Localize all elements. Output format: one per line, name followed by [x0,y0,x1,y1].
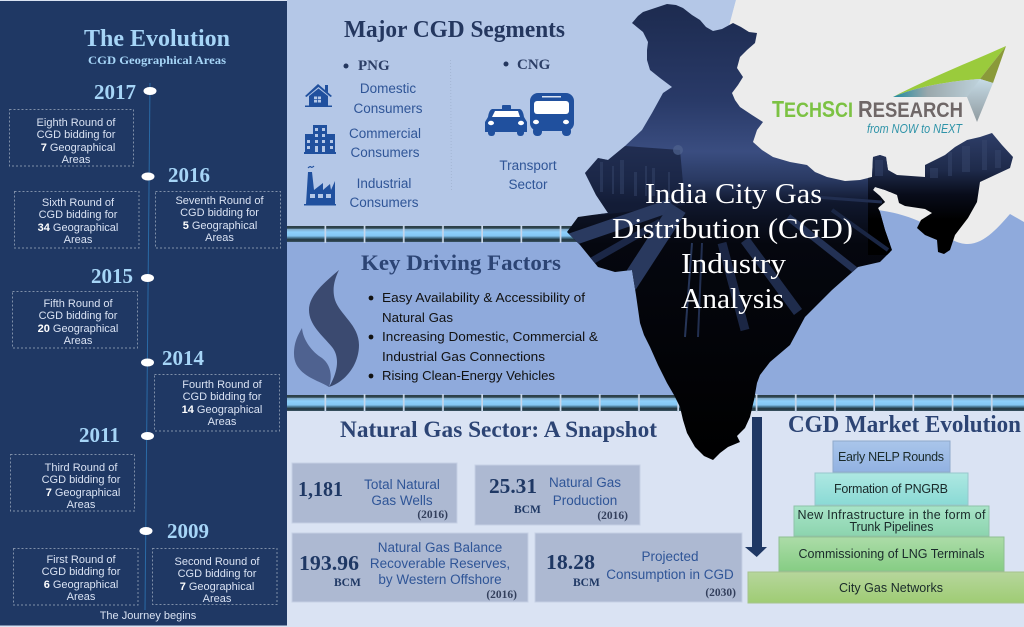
icon: bus [530,93,574,136]
photo texture: dark refinery on the west [580,146,685,215]
logo tagline: from NOW to NEXT [867,121,963,136]
box: fourth round: Fourth Round of [182,379,263,391]
box: fifth round: 20 Geographical [38,323,118,335]
arrow: market evolution direction [745,417,767,557]
stat: natural gas production: Natural Gas [549,475,621,490]
stat: balance recoverable reserves: Recoverable Reserves, [370,556,510,571]
box: first round: CGD bidding for [42,566,121,578]
box: third round: Third Round of [45,462,118,474]
map: India silhouette with pipeline photo [560,0,1018,470]
box: eighth round: 7 Geographical [41,142,115,154]
heading: Key Driving Factors: Key Driving Factors [361,250,561,275]
box: seventh round: Areas [205,232,234,244]
title: India City Gas Distribution (CGD) Industry Analysis: India City Gas [645,179,822,210]
stat: balance recoverable reserves: 193.96 [299,551,359,575]
stat: natural gas production [475,465,640,525]
label: PNG [344,58,390,74]
pyramid level: early NELP rounds: Early NELP Rounds [838,450,944,464]
box: fourth round [154,374,280,431]
timeline node: 2009 [140,519,209,543]
box: third round [10,454,134,511]
stat: natural gas production: 25.31 [489,474,537,498]
stat: total natural gas wells: 1,181 [298,477,343,501]
box: second round: 7 Geographical [180,581,254,593]
timeline node: 2014: 2014 [162,346,204,370]
stat: projected consumption: 18.28 [546,550,595,574]
panel: key driving factors [294,250,598,387]
timeline node: 2017 [94,80,156,104]
pyramid level: early NELP rounds [833,441,950,472]
text: domestic consumers [353,81,423,116]
pyramid level: LNG terminals [779,537,1004,571]
box: fourth round: 14 Geographical [182,404,262,416]
timeline node: 2011 [79,423,154,447]
box: fifth round: Areas [64,335,93,347]
heading: CGD Market Evolution: CGD Market Evolution [788,412,1021,438]
box: seventh round [156,192,280,248]
stat: projected consumption: Projected [641,549,699,564]
box: sixth round [14,192,139,248]
icon: taxi [485,105,527,136]
box: eighth round: CGD bidding for [37,129,116,141]
stat: balance recoverable reserves: by Western Offshore [378,572,502,587]
stat: total natural gas wells: (2016) [417,509,448,521]
list: driving factors: Industrial Gas Connections [382,349,546,364]
pipeline: lower [287,394,1024,412]
stat: projected consumption [535,533,742,602]
heading: Natural Gas Sector: A Snapshot: Natural Gas Sector: A Snapshot [340,417,657,442]
list: driving factors: Increasing Domestic, Commercial & [382,329,598,344]
text: industrial consumers [349,176,419,210]
box: fourth round: Areas [208,416,237,428]
icon: factory [304,166,336,206]
stat: balance recoverable reserves: (2016) [486,589,517,601]
box: seventh round: 5 Geographical [183,220,257,232]
pyramid level: LNG terminals: Commissioning of LNG Terminals [798,547,984,561]
timeline node: 2016 [142,163,210,187]
box: third round: Areas [67,499,96,511]
timeline node: 2015 [91,264,154,288]
caption: the journey begins: The Journey begins [100,610,197,622]
box: fifth round [12,292,138,348]
box: third round: CGD bidding for [42,474,121,486]
logo wordmark: TECHSCI [772,96,853,122]
photo texture: skyline [600,148,1001,198]
panel: natural gas snapshot [292,417,742,602]
text: commercial consumers: Consumers [350,145,420,160]
text: transport sector [499,158,557,192]
box: first round [14,548,138,605]
icon: commercial building [304,125,336,154]
text: industrial consumers: Industrial [357,176,411,191]
box: third round: 7 Geographical [46,487,120,499]
text: industrial consumers: Consumers [349,195,419,210]
icon: house [305,84,332,107]
stat: balance recoverable reserves: BCM [334,577,361,589]
timeline node: 2014 [141,346,204,370]
text: transport sector: Sector [508,177,548,192]
stat: balance recoverable reserves: Natural Gas Balance [378,540,502,555]
box: fifth round: CGD bidding for [39,310,118,322]
box: first round: Areas [67,591,96,603]
logo: TechSci Research: RESEARCH [858,96,963,122]
timeline axis [145,83,150,610]
list: driving factors: Easy Availability & Accessibility of [382,290,585,305]
background: top right light grey area [700,0,1024,244]
box: first round: 6 Geographical [44,579,118,591]
box: second round [152,548,277,605]
pyramid level: city gas networks [748,572,1024,603]
text: transport sector: Transport [499,158,557,173]
timeline node: 2017: 2017 [94,80,136,104]
timeline node: 2009: 2009 [167,519,209,543]
list: driving factors: Rising Clean-Energy Vehicles [382,368,555,383]
box: first round: First Round of [46,554,116,566]
box: sixth round: 34 Geographical [38,222,118,234]
stat: natural gas production: BCM [514,504,541,516]
timeline node: 2015: 2015 [91,264,133,288]
title: India City Gas Distribution (CGD) Industry Analysis: Industry [681,249,786,280]
box: eighth round [10,110,134,166]
panel: the evolution timeline [0,1,287,626]
box: sixth round: Areas [64,234,93,246]
title: India City Gas Distribution (CGD) Industry Analysis [612,179,853,315]
stat: total natural gas wells [292,463,457,523]
logo mark [893,46,1006,122]
pipeline: upper [287,225,587,243]
stat: total natural gas wells: Total Natural [364,477,440,492]
text: domestic consumers: Domestic [360,81,416,96]
label: PNG: PNG [358,58,390,74]
label: CNG: CNG [517,57,551,73]
pyramid level: trunk pipelines: New Infrastructure in the form of [798,508,986,522]
text: commercial consumers: Commercial [349,126,421,141]
pyramid level: formation of PNGRB: Formation of PNGRB [834,482,948,496]
box: second round: Second Round of [174,556,260,568]
box: seventh round: Seventh Round of [175,195,264,207]
box: fifth round: Fifth Round of [43,298,113,310]
icon: gas flame [294,270,359,387]
stat: projected consumption: BCM [573,577,600,589]
text: domestic consumers: Consumers [353,101,423,116]
heading: The Evolution: The Evolution [84,26,230,52]
photo texture: converging pipes [570,197,888,337]
pyramid level: trunk pipelines: Trunk Pipelines [850,520,934,534]
logo: TechSci Research [772,46,1006,136]
text: commercial consumers [349,126,421,160]
title: India City Gas Distribution (CGD) Industry Analysis: Distribution (CGD) [612,214,853,245]
background: key driving factors band [287,210,1024,400]
box: eighth round: Eighth Round of [37,117,116,129]
timeline node: 2011: 2011 [79,423,120,447]
box: fourth round: CGD bidding for [183,391,262,403]
box: sixth round: Sixth Round of [42,197,115,209]
box: second round: Areas [203,593,232,605]
pyramid level: formation of PNGRB [815,473,968,505]
panel: major CGD segments [304,17,574,210]
list: driving factors [369,290,598,383]
pyramid level: trunk pipelines [794,506,989,536]
stat: natural gas production: (2016) [597,510,628,522]
stat: natural gas production: Production [553,493,617,508]
heading: Major CGD Segments: Major CGD Segments [344,17,565,43]
stat: balance recoverable reserves [292,533,528,602]
stat: total natural gas wells: Gas Wells [371,493,433,508]
box: eighth round: Areas [62,154,91,166]
box: second round: CGD bidding for [178,568,257,580]
title: India City Gas Distribution (CGD) Industry Analysis: Analysis [681,284,784,315]
pyramid level: city gas networks: City Gas Networks [839,581,943,595]
panel: CGD market evolution [748,412,1024,603]
box: sixth round: CGD bidding for [39,209,118,221]
stat: projected consumption: Consumption in CGD [606,567,734,582]
timeline node: 2016: 2016 [168,163,210,187]
box: seventh round: CGD bidding for [180,207,259,219]
stat: projected consumption: (2030) [705,587,736,599]
background: major segments section [287,0,736,234]
subheading: CGD Geographical Areas: CGD Geographical Areas [88,53,226,67]
list: driving factors: Natural Gas [382,310,453,325]
